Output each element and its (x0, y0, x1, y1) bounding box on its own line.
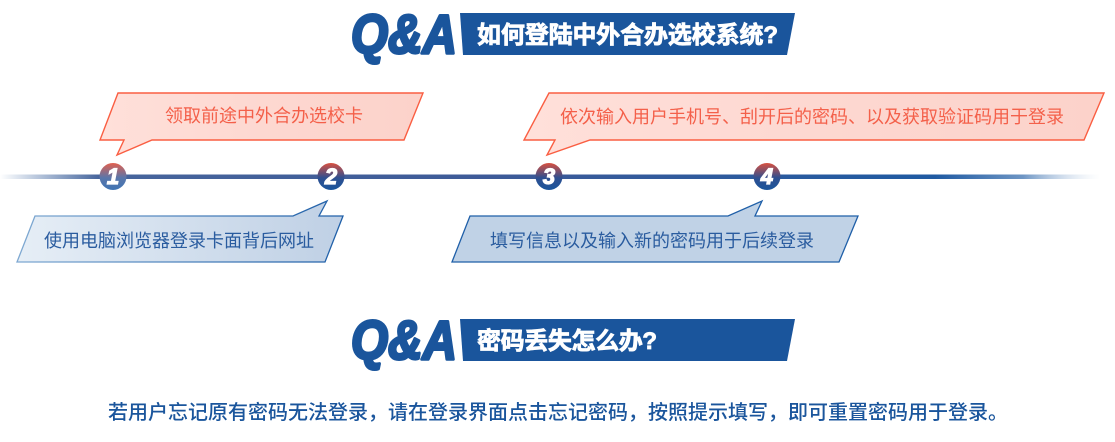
callout: step 2 (17, 201, 343, 262)
callout: step 4: 填写信息以及输入新的密码用于后续登录 (490, 231, 814, 251)
timeline line (0, 174, 1100, 179)
answer text: 若用户忘记原有密码无法登录，请在登录界面点击忘记密码，按照提示填写，即可重置密码用于登录。 (108, 401, 1008, 424)
step 1 marker (100, 163, 126, 190)
callout: step 1: 领取前途中外合办选校卡 (165, 106, 363, 126)
callout: step 3 (524, 93, 1104, 155)
step 4 marker (754, 163, 780, 190)
callout: step 3: 依次输入用户手机号、刮开后的密码、以及获取验证码用于登录 (560, 107, 1064, 127)
heading: lost password question (351, 309, 795, 371)
callout: step 4 (452, 201, 858, 262)
callout: step 1 (100, 93, 423, 155)
Q&A logo: Q&A (351, 309, 457, 371)
heading text: 如何登陆中外合办选校系统? (477, 22, 778, 49)
heading text: 密码丢失怎么办? (477, 327, 657, 355)
heading banner (460, 13, 795, 55)
Q&A logo: Q&A (351, 3, 457, 65)
step 2 marker (318, 163, 344, 190)
step 2 marker: 2 (324, 164, 338, 189)
step 3 marker: 3 (543, 164, 555, 189)
step 4 marker: 4 (760, 164, 773, 189)
step 3 marker (536, 163, 562, 190)
step 1 marker: 1 (107, 164, 119, 189)
heading banner (460, 319, 795, 361)
callout: step 2: 使用电脑浏览器登录卡面背后网址 (44, 231, 314, 251)
heading: login question (351, 3, 795, 65)
